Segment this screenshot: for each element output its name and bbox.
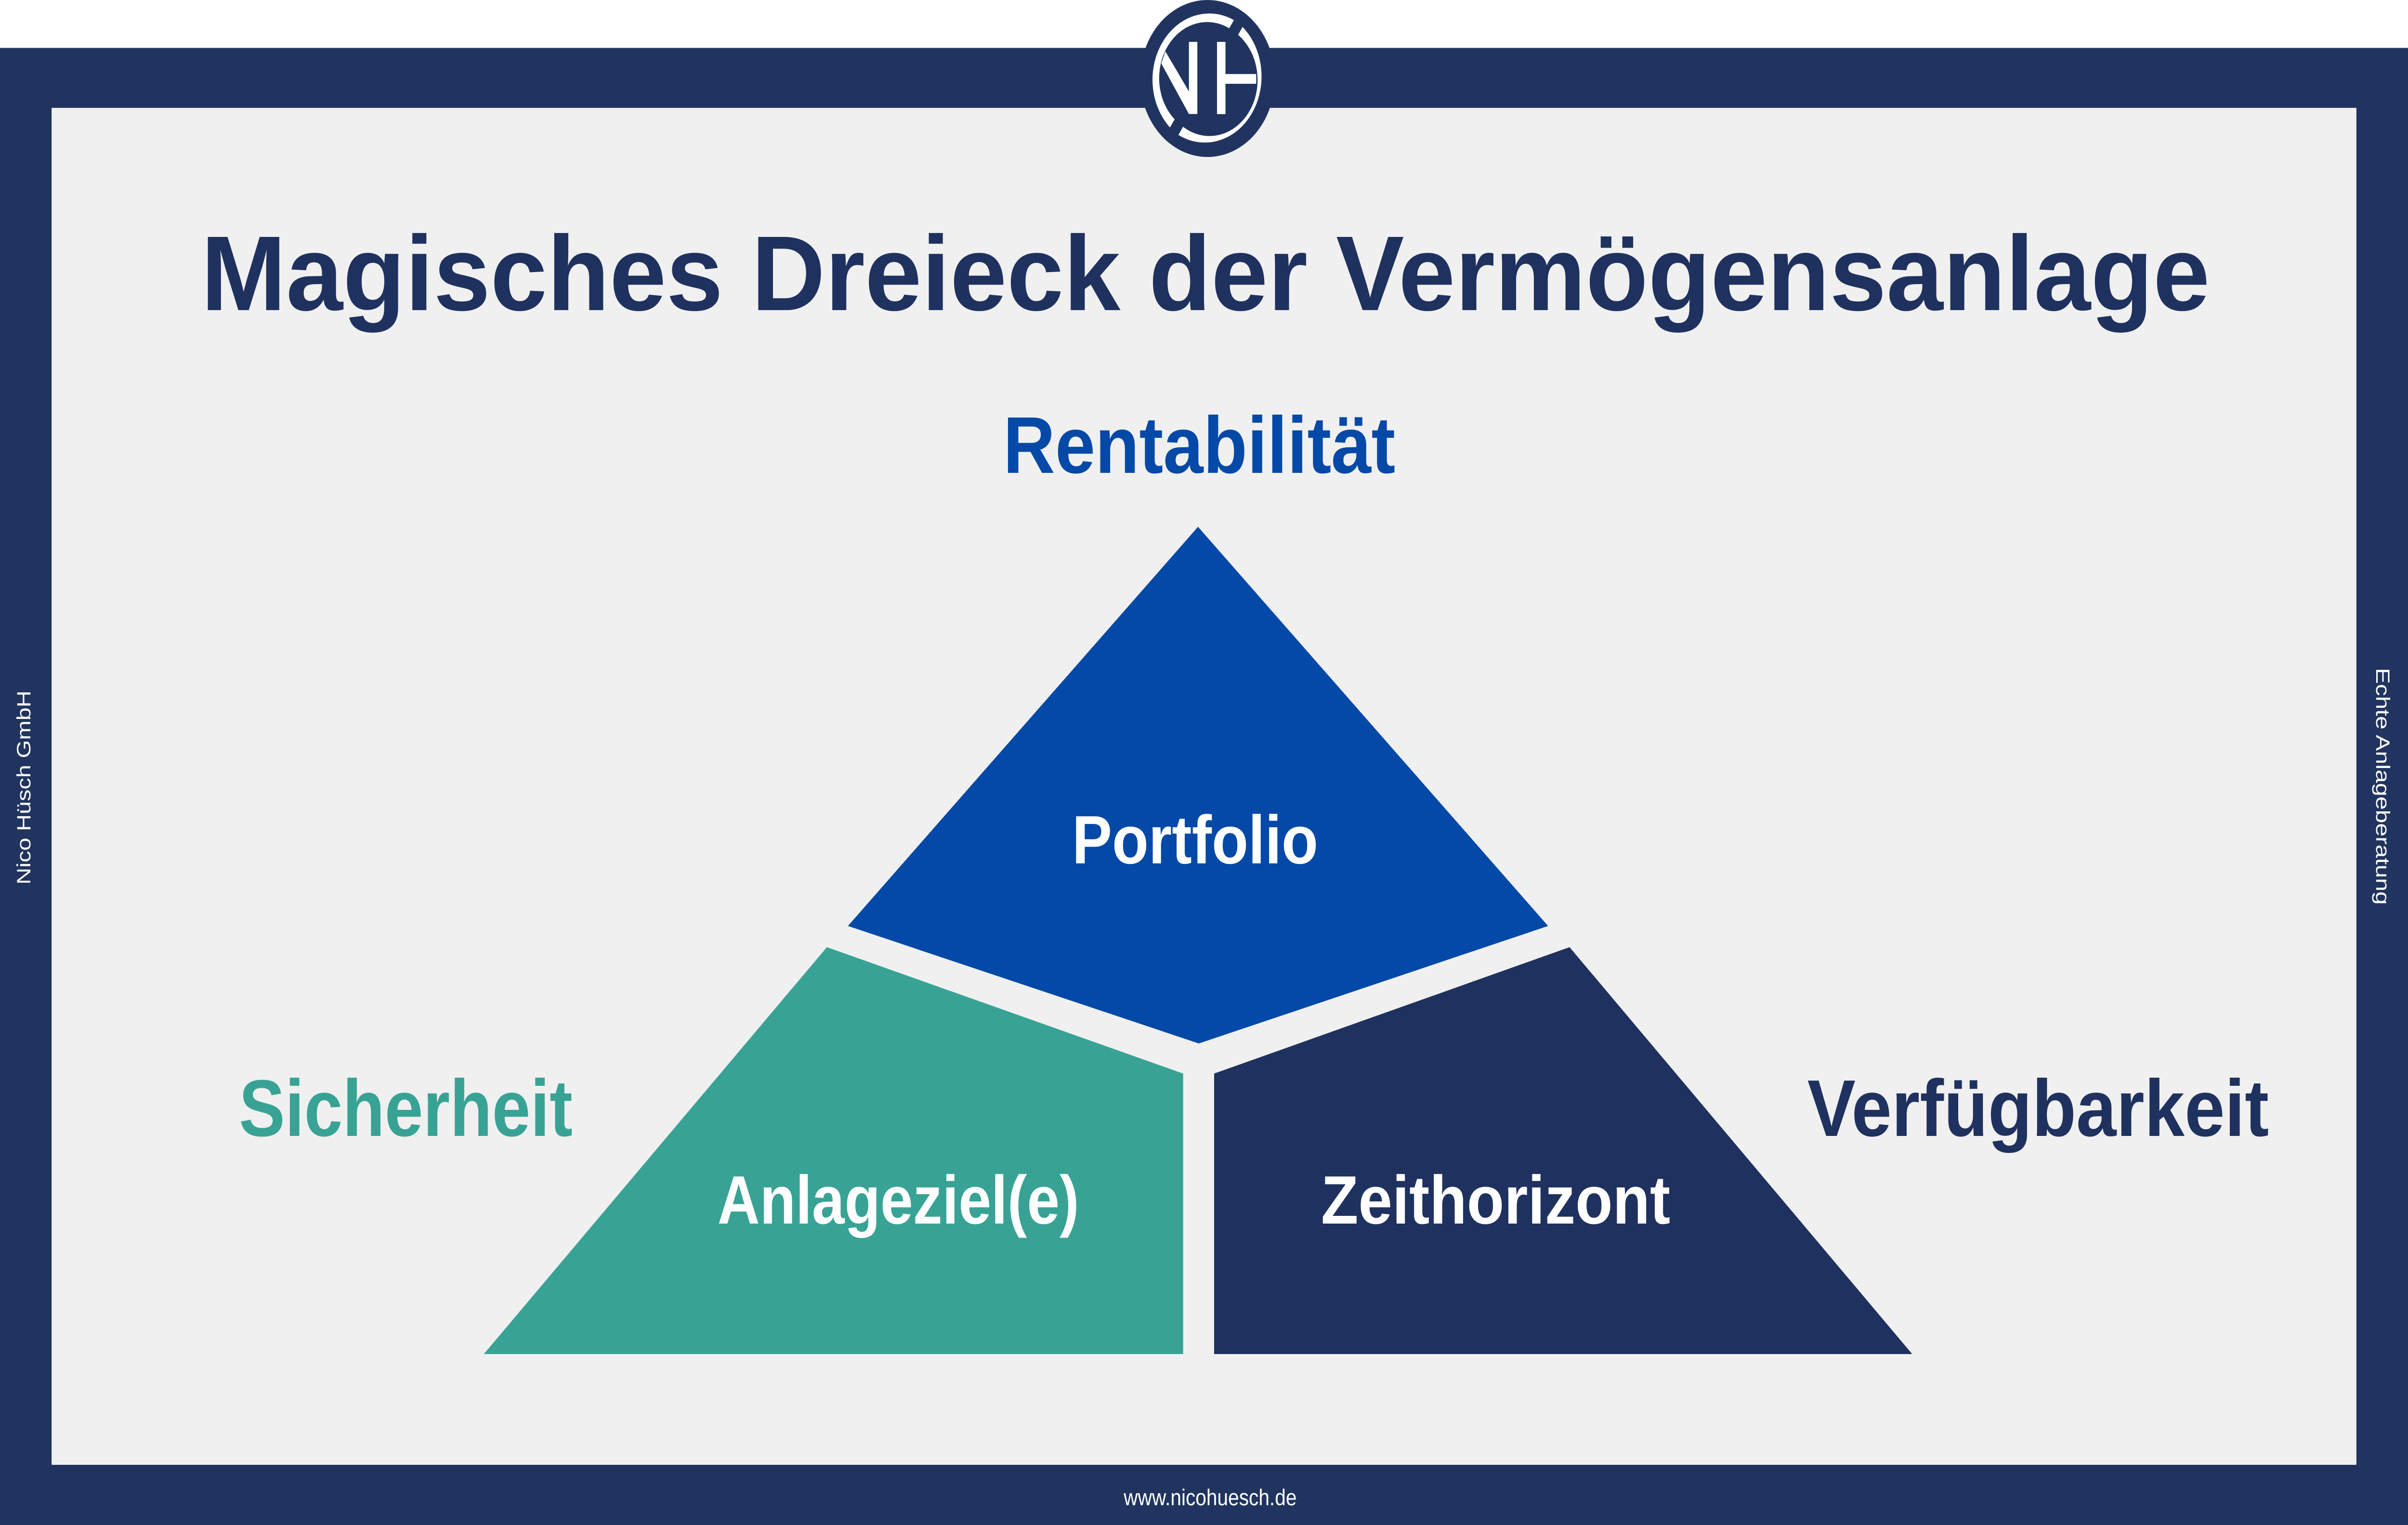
triangle segment: Portfolio [848, 527, 1548, 1043]
icon: NH logo [1140, 0, 1275, 157]
footer: website: www.nicohuesch.de [1123, 1485, 1296, 1511]
side text: left: Nico Hüsch GmbH [13, 691, 35, 885]
heading: Sicherheit: Sicherheit [239, 1063, 573, 1153]
label: Anlageziel(e): Anlageziel(e) [718, 1162, 1079, 1238]
triangle segment: Zeithorizont [1214, 947, 1912, 1354]
label: Portfolio: Portfolio [1072, 802, 1318, 878]
label: Zeithorizont: Zeithorizont [1321, 1162, 1670, 1238]
heading: Verfügbarkeit: Verfügbarkeit [1807, 1063, 2269, 1153]
triangle segment: Anlageziel(e) [484, 947, 1183, 1354]
title: Magisches Dreieck der Vermögensanlage [201, 214, 2210, 333]
side text: right: Echte Anlageberatung [2372, 668, 2394, 905]
heading: Rentabilität: Rentabilität [1003, 400, 1395, 490]
